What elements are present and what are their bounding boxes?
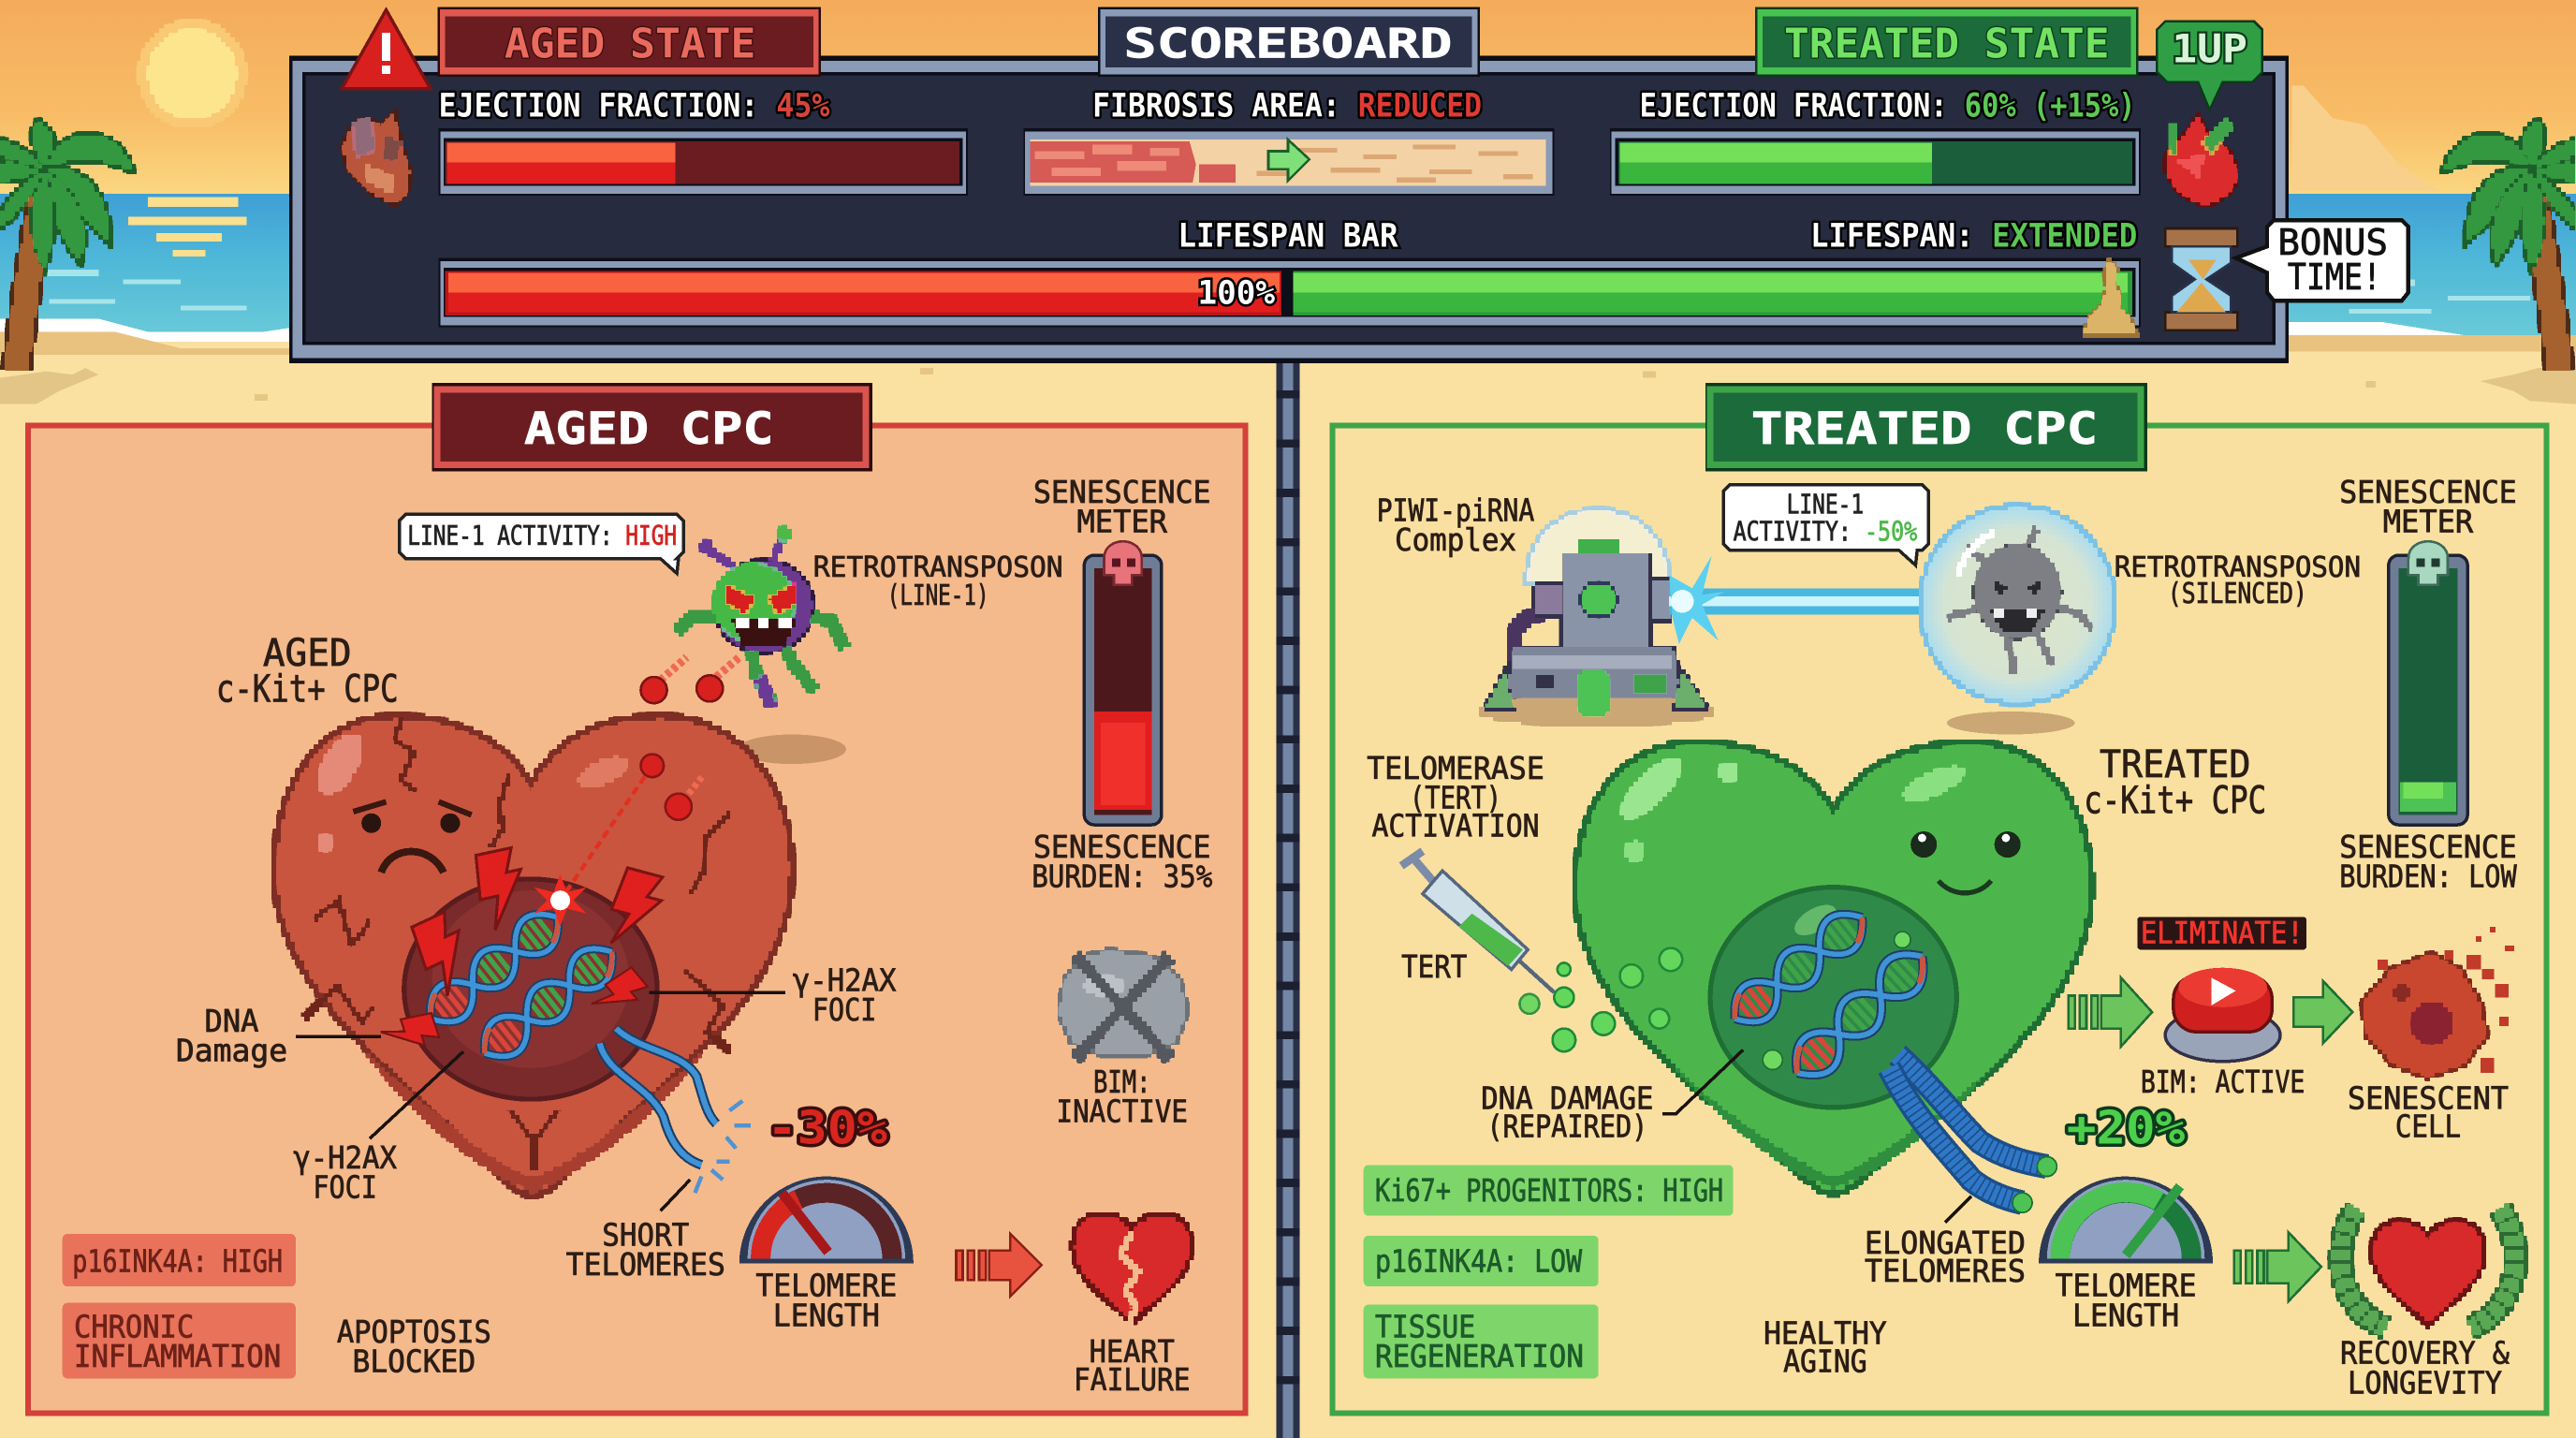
label: healthy aging: HEALTHY — [1764, 1315, 1887, 1352]
label: treated c-Kit+ CPC: c-Kit+ CPC — [2084, 779, 2266, 823]
label: elongated telomeres: TELOMERES — [1865, 1253, 2026, 1289]
label: heart failure: FAILURE — [1074, 1361, 1191, 1398]
label: DNA damage repaired: DNA DAMAGE — [1481, 1080, 1653, 1117]
BONUS TIME bubble: BONUS — [2277, 222, 2388, 264]
1UP bubble: 1UP — [2172, 26, 2247, 72]
gauge: telomere length aged — [739, 1177, 914, 1264]
icon: senescent cell — [2363, 929, 2513, 1078]
label: short telomeres: SHORT — [602, 1216, 689, 1253]
panel: treated CPC — [1332, 383, 2546, 1413]
heading: treated state: TREATED STATE — [1784, 20, 2110, 67]
tag: tissue regeneration: REGENERATION — [1375, 1338, 1584, 1374]
label: recovery and longevity: RECOVERY & — [2340, 1335, 2510, 1372]
tag: tissue regeneration: TISSUE — [1375, 1309, 1475, 1345]
arrow: to heart failure — [956, 1234, 1042, 1297]
aged heart — [274, 716, 792, 1195]
tag: chronic inflammation — [63, 1303, 296, 1378]
label: recovery and longevity: LONGEVITY — [2348, 1364, 2502, 1401]
eliminate label: ELIMINATE! — [2141, 917, 2304, 950]
LINE-1 activity speech bubble — [400, 514, 683, 574]
label: heart failure: HEART — [1090, 1333, 1175, 1370]
value: minus 30 percent: -30% — [768, 1100, 887, 1154]
label: DNA damage: DNA — [205, 1003, 258, 1039]
label: gamma-H2AX foci right: FOCI — [812, 991, 876, 1028]
aged anatomical heart icon — [342, 111, 411, 205]
label: senescence burden low — [2339, 829, 2518, 895]
label: senescence burden 35: SENESCENCE — [1033, 829, 1211, 865]
icon: sand pile — [2083, 259, 2137, 335]
lifespan extended label: LIFESPAN: EXTENDED — [1810, 216, 2137, 255]
label: DNA damage: Damage — [176, 1033, 287, 1069]
label: telomerase activation: TELOMERASE — [1367, 750, 1544, 786]
label: telomere length treated: LENGTH — [2072, 1297, 2179, 1333]
bar: fibrosis texture — [1023, 128, 1554, 196]
tag: Ki67 progenitors high: Ki67+ PROGENITORS: HIGH — [1375, 1172, 1723, 1209]
label: healthy aging: AGING — [1783, 1343, 1867, 1379]
heading: treated CPC: TREATED CPC — [1751, 404, 2098, 455]
tag: Ki67 progenitors high — [1364, 1165, 1734, 1216]
label: BIM inactive: BIM: — [1093, 1064, 1150, 1100]
label: senescence burden 35: BURDEN: 35% — [1032, 858, 1212, 895]
heading: aged state: AGED STATE — [505, 20, 755, 67]
heading: aged CPC — [432, 383, 872, 472]
tag: p16INK4A high — [63, 1234, 296, 1286]
heading: aged CPC: AGED CPC — [524, 404, 774, 455]
icon: red particles — [641, 657, 739, 703]
heading: treated state — [1756, 8, 2137, 76]
label: senescence meter treated — [2339, 474, 2517, 540]
label: apoptosis blocked: BLOCKED — [353, 1343, 476, 1379]
tag: p16INK4A high: p16INK4A: HIGH — [72, 1242, 283, 1279]
tag: tissue regeneration — [1364, 1304, 1599, 1378]
palm tree right — [2443, 120, 2576, 370]
fibrosis area label: FIBROSIS AREA: REDUCED — [1092, 87, 1482, 125]
tag: chronic inflammation: CHRONIC — [74, 1309, 194, 1345]
label: telomerase activation: (TERT) — [1410, 779, 1501, 815]
label: senescent cell — [2348, 1080, 2509, 1144]
label: TERT: TERT — [1401, 948, 1467, 985]
arrow: to BIM button — [2069, 977, 2152, 1047]
label: senescence meter treated: SENESCENCE — [2339, 474, 2517, 510]
gauge: telomere length treated — [2039, 1177, 2213, 1264]
label: DNA damage repaired — [1481, 1049, 1743, 1144]
impact beam — [534, 755, 703, 927]
nucleus with repaired DNA — [1710, 888, 1956, 1108]
green TERT particles — [1519, 948, 1682, 1051]
senescence meter aged — [1084, 555, 1162, 825]
label: BIM active: BIM: ACTIVE — [2141, 1064, 2305, 1100]
label: telomere length aged: TELOMERE — [755, 1268, 897, 1304]
label: senescence meter aged: METER — [1076, 504, 1168, 540]
label: telomere length treated — [2056, 1268, 2197, 1333]
value: plus 20 percent: +20% — [2067, 1100, 2186, 1154]
panel: aged CPC — [28, 383, 1245, 1413]
arrow: to senescent cell — [2293, 981, 2352, 1043]
label: apoptosis blocked: APOPTOSIS — [337, 1313, 491, 1350]
icon: hourglass — [2165, 228, 2237, 330]
label: telomerase activation — [1367, 750, 1544, 844]
bar: treated ejection fraction — [1610, 128, 2141, 196]
label: senescent cell: SENESCENT — [2348, 1080, 2509, 1117]
bar: aged ejection fraction — [439, 128, 968, 196]
ejection fraction treated label: EJECTION FRACTION: 60% (+15%) — [1640, 87, 2136, 125]
label: PIWI-piRNA complex: PIWI-piRNA — [1377, 492, 1534, 528]
label: telomere length aged: LENGTH — [773, 1297, 880, 1333]
treated heart — [1575, 742, 2091, 1193]
label: senescence meter aged: SENESCENCE — [1033, 474, 1211, 510]
ejection fraction aged label: EJECTION FRACTION: 45% — [439, 87, 829, 125]
icon: skull treated — [2408, 541, 2448, 585]
label: retrotransposon — [813, 551, 1063, 612]
heading: aged state — [439, 8, 820, 76]
icon: PIWI-piRNA machine — [1479, 509, 1715, 726]
label: aged c-Kit+ CPC: AGED — [263, 631, 352, 675]
BONUS TIME bubble: TIME! — [2288, 257, 2381, 299]
face: sad — [353, 801, 472, 873]
sun — [138, 20, 246, 128]
label: heart failure — [1074, 1333, 1191, 1398]
lifespan bar — [439, 258, 2141, 327]
label: treated c-Kit+ CPC — [2084, 742, 2266, 823]
label: apoptosis blocked — [337, 1313, 491, 1379]
label: short telomeres: TELOMERES — [566, 1246, 725, 1283]
palm tree left — [0, 120, 133, 370]
icons: lightning damage — [379, 846, 667, 1057]
icon: fibrosis arrow — [1268, 139, 1310, 181]
label: senescence meter aged — [1033, 474, 1211, 540]
LINE-1 activity -50 bubble — [1723, 485, 1928, 565]
label: gamma-H2AX foci right — [649, 961, 896, 1028]
label: telomere length treated: TELOMERE — [2056, 1268, 2197, 1304]
label: healthy aging — [1764, 1315, 1887, 1379]
nucleus with damaged DNA — [404, 879, 657, 1099]
icon: inactive BIM — [1058, 949, 1188, 1058]
label: treated c-Kit+ CPC: TREATED — [2100, 742, 2250, 786]
1UP bubble — [2157, 22, 2262, 110]
beam — [1669, 555, 1921, 644]
label: aged c-Kit+ CPC: c-Kit+ CPC — [216, 667, 399, 711]
face: happy — [1910, 831, 2021, 893]
senescence meter treated — [2389, 555, 2467, 825]
label: telomere length aged — [755, 1268, 897, 1333]
BONUS TIME bubble — [2236, 220, 2408, 301]
elongated telomeres — [1889, 1055, 2056, 1212]
label: retrotransposon silenced: RETROTRANSPOSON — [2115, 551, 2361, 584]
icon: BIM button — [2165, 968, 2280, 1062]
label: gamma-H2AX foci bottom: γ-H2AX — [293, 1139, 397, 1176]
label: recovery and longevity — [2340, 1335, 2510, 1401]
tag: chronic inflammation: INFLAMMATION — [74, 1338, 281, 1374]
icon: broken heart — [1073, 1214, 1191, 1325]
label: short telomeres — [566, 1180, 725, 1283]
label: senescence burden low: BURDEN: LOW — [2339, 858, 2518, 895]
tag: p16INK4A low — [1364, 1236, 1599, 1286]
treated anatomical heart icon — [2165, 115, 2237, 205]
LINE-1 activity -50 bubble: ACTIVITY: -50% — [1734, 516, 1917, 547]
label: retrotransposon silenced: (SILENCED) — [2168, 578, 2307, 610]
heading: treated CPC — [1705, 383, 2147, 472]
label: aged c-Kit+ CPC — [216, 631, 399, 711]
icon: TERT syringe — [1401, 851, 1554, 992]
label: senescent cell: CELL — [2395, 1108, 2461, 1144]
icon: skull aged — [1104, 541, 1142, 585]
lifespan bar label: LIFESPAN BAR — [1178, 216, 1398, 255]
icon: silenced retrotransposon in bubble — [1921, 506, 2115, 703]
heading: scoreboard: SCOREBOARD — [1123, 20, 1453, 67]
arrow: to recovery — [2234, 1232, 2321, 1301]
warning triangle icon — [342, 10, 431, 89]
lifespan bar: 100% — [1197, 274, 1275, 313]
telomeres frayed — [600, 1029, 751, 1193]
icon: retrotransposon virus — [677, 526, 844, 707]
label: gamma-H2AX foci right: γ-H2AX — [793, 961, 896, 998]
label: retrotransposon silenced — [2115, 551, 2361, 610]
label: elongated telomeres — [1865, 1196, 2026, 1289]
label: BIM inactive: INACTIVE — [1057, 1093, 1188, 1130]
label: retrotransposon: RETROTRANSPOSON — [813, 551, 1063, 584]
label: BIM inactive — [1057, 1064, 1188, 1130]
label: PIWI-piRNA complex: Complex — [1395, 521, 1516, 558]
label: DNA damage — [176, 1003, 381, 1069]
label: DNA damage repaired: (REPAIRED) — [1486, 1108, 1647, 1144]
label: retrotransposon: (LINE-1) — [887, 580, 989, 612]
label: elongated telomeres: ELONGATED — [1865, 1225, 2026, 1261]
heading: scoreboard — [1099, 8, 1479, 76]
label: senescence burden low: SENESCENCE — [2339, 829, 2517, 865]
label: senescence burden 35 — [1032, 829, 1212, 895]
LINE-1 activity -50 bubble: LINE-1 — [1787, 489, 1864, 520]
icon: heart with laurels — [2341, 1210, 2515, 1328]
center divider — [1277, 359, 1299, 1438]
label: PIWI-piRNA complex — [1377, 492, 1534, 558]
tag: p16INK4A low: p16INK4A: LOW — [1375, 1242, 1583, 1279]
label: telomerase activation: ACTIVATION — [1372, 807, 1540, 844]
LINE-1 activity speech bubble: LINE-1 ACTIVITY: HIGH — [407, 521, 677, 551]
label: gamma-H2AX foci bottom: FOCI — [313, 1168, 377, 1205]
label: senescence meter treated: METER — [2383, 504, 2474, 540]
scoreboard panel — [289, 56, 2289, 363]
label: gamma-H2AX foci bottom — [293, 1051, 463, 1205]
